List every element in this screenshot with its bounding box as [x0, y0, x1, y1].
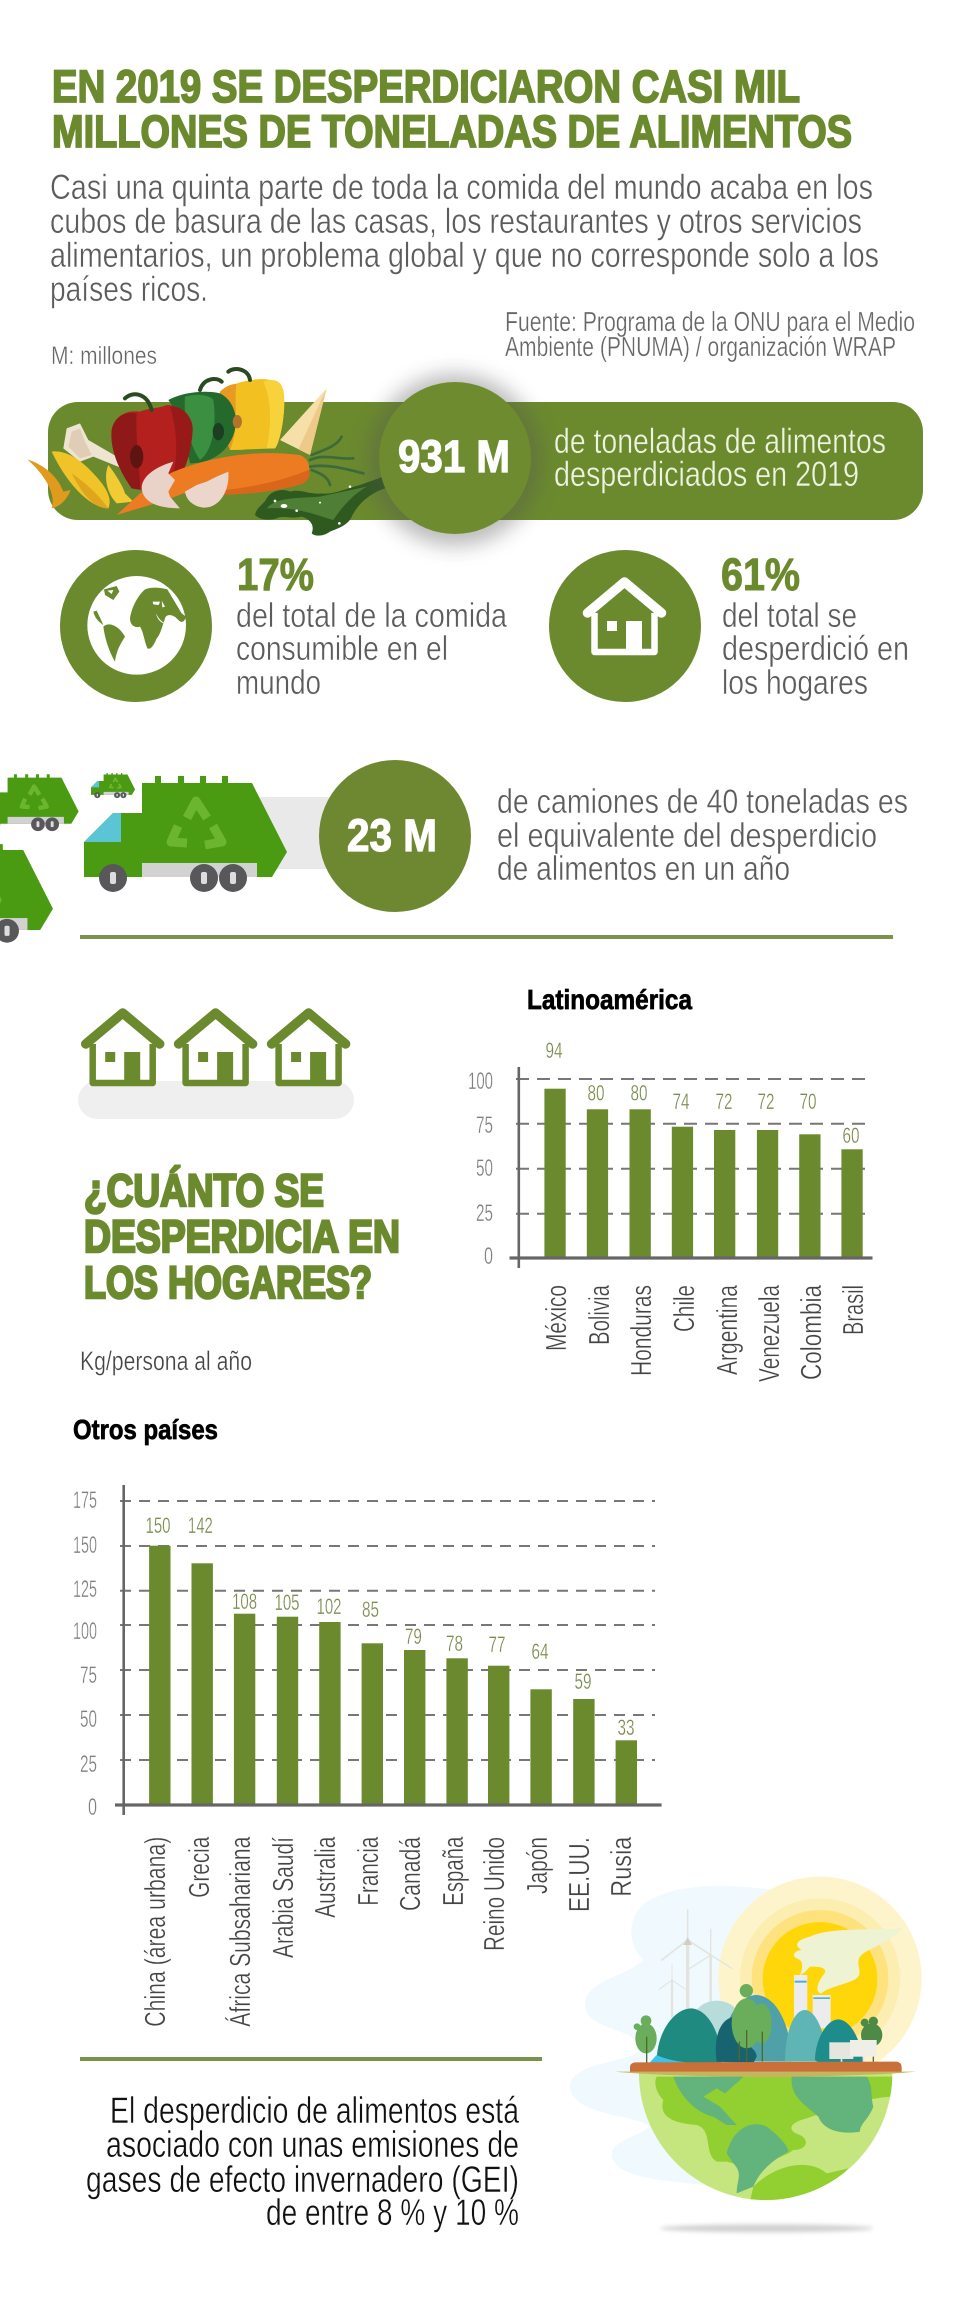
y axis labels [468, 1068, 493, 1270]
value labels: 85 [362, 1597, 379, 1622]
axes [510, 1067, 872, 1268]
closing statement: gases de efecto invernadero (GEI) [86, 2159, 519, 2200]
panel: trucks equivalent [0, 760, 908, 943]
bar chart: Otros países [73, 1485, 662, 2027]
intro text [50, 168, 879, 309]
y axis labels: 100 [468, 1068, 493, 1095]
caption: trucks [498, 788, 907, 880]
icon: big garbage truck [84, 776, 287, 892]
closing statement: de entre 8 % y 10 % [266, 2192, 519, 2233]
value labels: 142 [188, 1513, 213, 1538]
category labels: Grecia [184, 1836, 216, 1898]
caption: 61%: los hogares [722, 664, 868, 702]
category labels: EE.UU. [564, 1837, 596, 1912]
value labels: 108 [232, 1589, 257, 1614]
figure: 61%: 61% [721, 549, 800, 600]
y axis labels: 25 [476, 1200, 493, 1227]
figure: 17%: 17% [237, 549, 314, 600]
icon: small truck [91, 773, 135, 798]
banner caption: desperdiciados en 2019 [554, 455, 859, 494]
chart title: Otros países: Otros países [73, 1414, 218, 1445]
category labels [541, 1284, 870, 1382]
closing statement [86, 2090, 519, 2233]
y axis labels: 50 [476, 1155, 493, 1182]
category labels: Argentina [712, 1284, 744, 1375]
value labels: 102 [316, 1594, 342, 1619]
illustration: half-globe with factory and sun [570, 1877, 922, 2232]
title: EN 2019 SE DESPERDICIARON CASI MIL [52, 61, 800, 112]
category labels: Reino Unido [479, 1837, 511, 1951]
value labels: 78 [446, 1631, 463, 1656]
category labels: China (área urbana) [140, 1837, 172, 2027]
section heading: ¿CUÁNTO SE [84, 1165, 324, 1216]
y axis labels: 125 [73, 1576, 97, 1603]
y axis labels: 0 [88, 1794, 97, 1821]
panel: houses icon row [78, 1013, 354, 1119]
icon: partial truck left [0, 774, 79, 831]
chart title: Latinoamérica: Latinoamérica [527, 984, 692, 1015]
panel: 931 M banner [27, 369, 923, 546]
y axis labels: 0 [484, 1243, 493, 1270]
title [52, 61, 852, 157]
caption: 17%: del total de la comida [236, 597, 507, 635]
category labels: Francia [353, 1836, 385, 1906]
y axis labels [73, 1487, 97, 1821]
category labels: Canadá [395, 1836, 427, 1911]
y axis labels: 75 [476, 1112, 493, 1139]
category labels: Chile [669, 1285, 701, 1332]
icon: house 3 [272, 1013, 346, 1084]
category labels: Rusia [606, 1836, 638, 1897]
value labels: 80 [588, 1081, 604, 1106]
category labels: Venezuela [754, 1284, 786, 1382]
category labels: México [541, 1285, 573, 1351]
category labels: Arabia Saudí [268, 1837, 300, 1958]
bars [544, 1089, 863, 1258]
closing statement: asociado con unas emisiones de [106, 2124, 519, 2165]
source note [505, 306, 915, 362]
y axis labels: 175 [73, 1487, 97, 1514]
illustration: rotten food pile [27, 369, 385, 536]
unit note: M: millones [51, 342, 157, 370]
value labels: 64 [532, 1639, 548, 1664]
banner bar [48, 402, 923, 520]
value labels: 105 [274, 1590, 300, 1615]
section heading: LOS HOGARES? [84, 1257, 372, 1308]
value labels: 72 [716, 1089, 732, 1114]
caption: 61% [722, 597, 909, 702]
value labels: 94 [546, 1038, 562, 1063]
value labels: 33 [618, 1715, 634, 1740]
caption: 61%: del total se [722, 597, 857, 635]
closing statement: El desperdicio de alimentos está [110, 2090, 519, 2131]
value labels: 60 [842, 1123, 860, 1148]
category labels: Brasil [838, 1285, 870, 1335]
y axis labels: 150 [73, 1532, 97, 1559]
category labels: Colombia [796, 1284, 828, 1380]
panel: 61% stat [549, 549, 909, 702]
icon: partial truck bottom [0, 844, 53, 943]
value labels: 79 [405, 1624, 422, 1649]
caption: trucks: el equivalente del desperdicio [497, 817, 877, 855]
glow behind circle [369, 374, 541, 546]
caption: trucks: de alimentos en un año [497, 850, 790, 888]
value labels [546, 1038, 860, 1148]
caption: 17%: consumible en el [236, 630, 448, 668]
value labels: 77 [488, 1632, 506, 1657]
caption: 17% [236, 597, 507, 702]
bar chart: Latinoamérica [468, 1038, 872, 1382]
value labels: 80 [630, 1081, 648, 1106]
y axis labels: 50 [80, 1706, 97, 1733]
icon: house 1 [86, 1013, 160, 1084]
y axis labels: 25 [80, 1751, 97, 1778]
section heading: DESPERDICIA EN [84, 1211, 400, 1262]
value labels: 150 [146, 1513, 170, 1538]
icon: house 2 [179, 1013, 253, 1084]
axes [115, 1485, 662, 1815]
category labels: Australia [310, 1836, 342, 1918]
panel: 17% stat [60, 549, 507, 702]
y axis labels: 100 [73, 1618, 97, 1645]
y axis labels: 75 [80, 1662, 97, 1689]
unit label: Kg/persona al año [80, 1346, 252, 1376]
banner caption [554, 422, 886, 494]
value labels: 59 [574, 1669, 592, 1694]
category labels: Japón [522, 1837, 554, 1894]
banner caption: de toneladas de alimentos [554, 422, 886, 461]
category labels: África Subsahariana [224, 1836, 257, 2027]
figure: 931 M: 931 M [398, 431, 510, 482]
caption: 61%: desperdició en [722, 630, 909, 668]
circle: 931 M [379, 382, 531, 534]
value labels: 70 [800, 1089, 816, 1114]
value labels: 72 [758, 1089, 774, 1114]
bars [149, 1546, 637, 1805]
figure: 23 M: 23 M [347, 810, 437, 861]
circle: 23 M [319, 760, 471, 912]
value labels: 74 [672, 1089, 690, 1114]
category labels: Bolivia [584, 1284, 616, 1345]
intro text: países ricos. [50, 270, 208, 309]
category labels: Honduras [626, 1285, 658, 1376]
icon: house [549, 550, 701, 702]
category labels: España [438, 1836, 470, 1906]
icon: globe [60, 550, 212, 702]
road band [259, 797, 330, 869]
ground pill [78, 1081, 354, 1119]
caption: 17%: mundo [236, 664, 321, 702]
category labels [140, 1836, 638, 2027]
value labels [146, 1513, 634, 1740]
section heading [84, 1165, 400, 1308]
